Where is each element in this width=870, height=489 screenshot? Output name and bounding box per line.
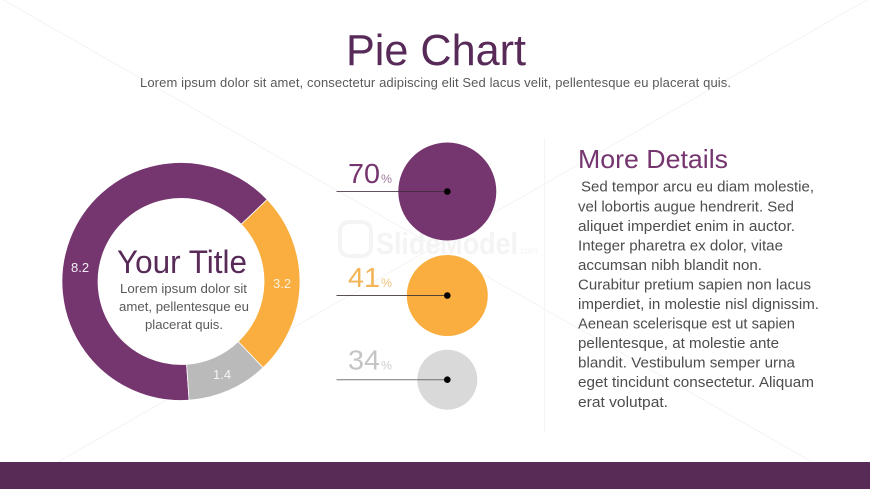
details paragraph: Integer pharetra ex dolor, vitae bbox=[578, 238, 783, 254]
circle gray bbox=[417, 350, 477, 410]
details paragraph: eget tincidunt consectetur. Aliquam bbox=[578, 375, 814, 391]
details paragraph: accumsan nibh blandit non. bbox=[578, 258, 762, 274]
details paragraph: aliquet imperdiet enim in auctor. bbox=[578, 219, 795, 235]
percent sign: % bbox=[381, 358, 392, 372]
footer bar bbox=[0, 462, 870, 489]
value: 34 bbox=[348, 344, 380, 376]
value label 8.2: 8.2 bbox=[71, 260, 89, 275]
details paragraph: erat volutpat. bbox=[578, 395, 668, 411]
leader line bbox=[336, 379, 447, 381]
details paragraph: Sed tempor arcu eu diam molestie, bbox=[581, 180, 814, 196]
stat: 34% bbox=[336, 344, 477, 410]
center description: Lorem ipsum dolor sit bbox=[120, 281, 247, 296]
subtitle: Lorem ipsum dolor sit amet, consectetur adipiscing elit Sed lacus velit, pellentesque eu placerat quis. bbox=[140, 75, 731, 90]
segment: purple 8.2 bbox=[62, 162, 267, 400]
dot bbox=[444, 292, 451, 299]
details paragraph: vel lobortis augue hendrerit. Sed bbox=[578, 199, 794, 215]
leader line bbox=[336, 294, 447, 296]
details paragraph: blandit. Vestibulum semper urna bbox=[578, 356, 796, 372]
details paragraph: imperdiet, in molestie nisl dignissim. bbox=[578, 297, 819, 313]
donut chart bbox=[62, 162, 300, 400]
value: 70 bbox=[348, 158, 380, 189]
value: 41 bbox=[348, 262, 380, 293]
center description: placerat quis. bbox=[145, 317, 223, 332]
title: Pie Chart bbox=[346, 26, 526, 75]
segment: gray 1.4 bbox=[187, 342, 263, 400]
watermark: SlideModel bbox=[376, 226, 518, 261]
value label 3.2: 3.2 bbox=[273, 276, 291, 291]
details paragraph: Curabitur pretium sapien non lacus bbox=[578, 278, 811, 294]
details heading: More Details bbox=[578, 144, 728, 174]
leader line bbox=[336, 190, 447, 192]
circle orange bbox=[407, 255, 488, 336]
watermark: .com bbox=[518, 246, 538, 257]
value label 1.4: 1.4 bbox=[213, 367, 231, 382]
stat: 70% bbox=[336, 142, 496, 240]
stat: 41% bbox=[336, 255, 488, 336]
percent sign: % bbox=[381, 172, 392, 186]
details paragraph: Aenean scelerisque est ut sapien bbox=[578, 317, 795, 333]
dot bbox=[444, 188, 451, 195]
details paragraph: pellentesque, at molestie ante bbox=[578, 336, 779, 352]
details paragraph bbox=[578, 180, 819, 411]
center title: Your Title bbox=[117, 244, 247, 280]
percent sign: % bbox=[381, 276, 392, 290]
segment: orange 3.2 bbox=[238, 200, 300, 368]
circle purple bbox=[398, 142, 496, 240]
center text bbox=[117, 244, 249, 332]
dot bbox=[444, 376, 451, 383]
center description bbox=[119, 281, 249, 332]
center description: amet, pellentesque eu bbox=[119, 299, 249, 314]
